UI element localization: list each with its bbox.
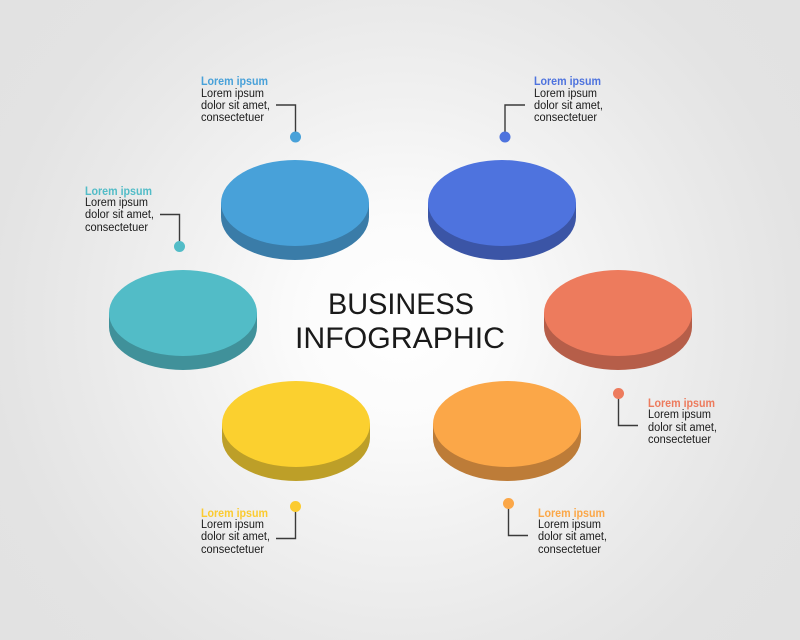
callout: light blue [201,76,301,142]
callout: red: Lorem ipsum [648,398,715,410]
callout: yellow: dolor sit amet, [201,531,270,543]
callout: dark blue: dolor sit amet, [534,100,603,112]
callout: dark blue: Lorem ipsum [534,76,601,88]
callout: orange: Lorem ipsum [538,508,605,520]
callout: red [613,388,717,446]
callout: light blue: dolor sit amet, [201,100,270,112]
disc: red [544,270,692,370]
callout: yellow: consectetuer [201,544,264,556]
callout: orange: dolor sit amet, [538,531,607,543]
callout: yellow: Lorem ipsum [201,508,268,520]
callout: red: dolor sit amet, [648,422,717,434]
disc: teal [109,270,257,370]
callout: dark blue: consectetuer [534,112,597,124]
callout: light blue: consectetuer [201,112,264,124]
callout: dark blue [500,76,603,142]
callout: teal: consectetuer [85,222,148,234]
callout: light blue: Lorem ipsum [201,88,264,100]
callout: teal [85,186,185,252]
title [295,288,505,355]
disc: orange [433,381,581,481]
disc: light blue [221,160,369,260]
callout: orange: Lorem ipsum [538,519,601,531]
callout: yellow: Lorem ipsum [201,519,264,531]
callout: red: consectetuer [648,434,711,446]
callout: dark blue: Lorem ipsum [534,88,597,100]
disc: dark blue [428,160,576,260]
callout: yellow [201,501,301,556]
callout: teal: Lorem ipsum [85,186,152,198]
callout: orange [503,498,607,556]
callout: orange: consectetuer [538,544,601,556]
callout: teal: Lorem ipsum [85,197,148,209]
disc: yellow [222,381,370,481]
title: INFOGRAPHIC [295,322,505,355]
title: BUSINESS [328,288,474,321]
callout: red: Lorem ipsum [648,409,711,421]
callout: teal: dolor sit amet, [85,209,154,221]
callout: light blue: Lorem ipsum [201,76,268,88]
